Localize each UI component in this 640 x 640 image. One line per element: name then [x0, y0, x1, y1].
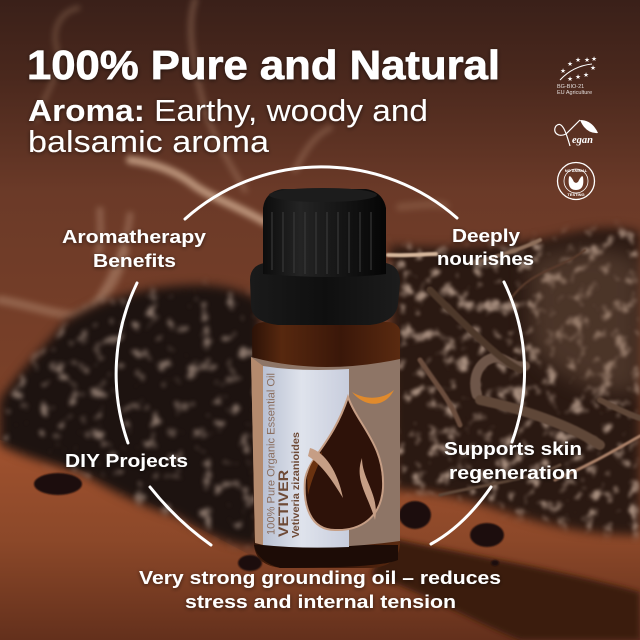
icon: EU organic leaf: ★: [591, 55, 597, 63]
bottom callout: stress and internal tension: [185, 592, 456, 612]
benefit: skin regeneration: [444, 439, 582, 483]
table surface: [0, 440, 640, 640]
soil pile and roots right: [380, 215, 640, 545]
icon: EU organic leaf: BG-BIO-21: [557, 84, 584, 90]
benefit: aromatherapy: Benefits: [93, 251, 176, 271]
benefit: deeply nourishes: [437, 226, 534, 269]
soil pile left: [0, 278, 264, 552]
icon: no animal testing: TESTING: [567, 192, 585, 197]
label text: VETIVER: [275, 470, 291, 537]
bottom callout: [139, 568, 501, 612]
subtitle aroma: [28, 93, 428, 159]
bottle neck collar: [250, 263, 400, 325]
label text: 100% Pure Organic Essential Oil: [266, 373, 278, 535]
blurred twigs upper left: [0, 0, 445, 315]
cap ridges: [272, 212, 371, 274]
table shadow: [370, 538, 640, 640]
icon: EU organic leaf: ★: [583, 71, 589, 79]
icon: EU organic leaf: ★: [584, 56, 590, 64]
bottle glass: [252, 322, 400, 568]
subtitle aroma: Aroma: Earthy, woody and: [28, 93, 428, 128]
icon: no animal testing: [558, 162, 594, 200]
icon: vegan: egan: [572, 135, 593, 146]
bottle label: [251, 357, 400, 548]
icon: EU organic leaf: EU Agriculture: [557, 90, 592, 96]
label drop window: [305, 397, 383, 530]
icon: EU organic leaf: ★: [560, 67, 566, 75]
soil clumps foreground: [34, 473, 504, 571]
label text: Vetiveria zizanioides: [290, 432, 302, 538]
sharp roots right: [388, 240, 640, 495]
benefit: DIY projects: DIY Projects: [65, 451, 188, 471]
benefit: aromatherapy: Aromatherapy: [62, 227, 206, 247]
icon: EU organic leaf: ★: [590, 64, 596, 72]
title: 100% Pure and Natural: [27, 42, 500, 88]
bottle: [250, 188, 400, 568]
icon: EU organic leaf: ★: [567, 60, 573, 68]
icon: EU organic leaf: [557, 55, 597, 96]
subtitle aroma: balsamic aroma: [28, 124, 270, 159]
label text: [266, 373, 302, 538]
benefit: aromatherapy: [62, 227, 206, 271]
icon: EU organic leaf: ★: [575, 56, 581, 64]
benefit: skin regeneration: regeneration: [449, 463, 578, 483]
circular arc ring: [116, 167, 525, 545]
benefit: deeply nourishes: nourishes: [437, 249, 534, 269]
icon: no animal testing: NO ANIMAL: [565, 168, 588, 173]
benefit: skin regeneration: Supports skin: [444, 439, 582, 459]
icon: vegan: [555, 120, 598, 146]
icon: EU organic leaf: ★: [567, 75, 573, 83]
icon: EU organic leaf: ★: [575, 73, 581, 81]
bottle cap: [263, 189, 386, 277]
bottom callout: Very strong grounding oil – reduces: [139, 568, 501, 588]
benefit: deeply nourishes: Deeply: [452, 226, 520, 246]
